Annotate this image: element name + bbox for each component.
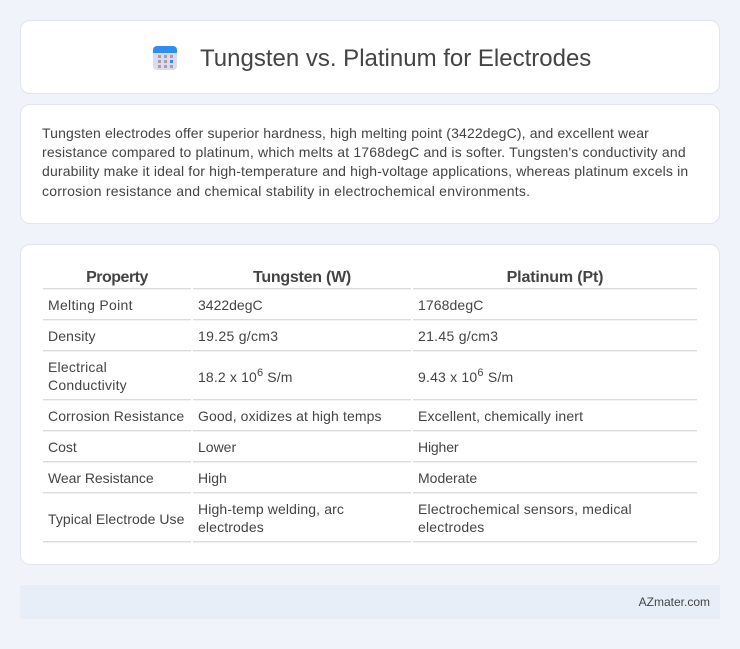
summary text: Tungsten electrodes offer superior hardness, high melting point (3422degC), and excellent wear (42, 124, 649, 140)
row: typical electrode use: electrodes (418, 519, 484, 535)
row: wear resistance (48, 470, 477, 486)
row: density: 19.25 g/cm3 (198, 328, 278, 344)
row: typical electrode use: High-temp welding, arc (198, 501, 344, 517)
table header: Property (86, 269, 148, 286)
row: melting point (48, 297, 483, 313)
row: electrical conductivity: 18.2 x 106 S/m (198, 367, 293, 385)
row: density (48, 328, 498, 344)
summary text: durability make it ideal for high-temperature and high-voltage applications, whereas platinum excels in (42, 163, 688, 179)
row: cost: Lower (198, 439, 236, 455)
row: corrosion resistance: Corrosion Resistance (48, 408, 184, 424)
row: density: Density (48, 328, 96, 344)
title: Tungsten vs. Platinum for Electrodes (200, 45, 591, 72)
row: corrosion resistance: Good, oxidizes at high temps (198, 408, 382, 424)
table header: Tungsten (W) (253, 269, 351, 286)
row: wear resistance: Moderate (418, 470, 477, 486)
summary text: corrosion resistance and chemical stability in electrochemical environments. (42, 183, 530, 199)
row: density: 21.45 g/cm3 (418, 328, 498, 344)
panel: summary (20, 104, 720, 224)
row: electrical conductivity: 9.43 x 106 S/m (418, 367, 513, 385)
summary text: resistance compared to platinum, which melts at 1768degC and is softer. Tungsten's conductivity and (42, 144, 686, 160)
row: corrosion resistance (48, 408, 583, 424)
row: typical electrode use: electrodes (198, 519, 264, 535)
row: melting point: 1768degC (418, 297, 483, 313)
row: electrical conductivity: Conductivity (48, 377, 127, 393)
row: wear resistance: High (198, 470, 227, 486)
row: cost: Cost (48, 439, 77, 455)
footer bar (20, 585, 720, 619)
row: corrosion resistance: Excellent, chemically inert (418, 408, 583, 424)
row: typical electrode use: Electrochemical sensors, medical (418, 501, 632, 517)
row: typical electrode use (48, 501, 632, 535)
row: typical electrode use: Typical Electrode Use (48, 511, 184, 527)
summary text (42, 124, 688, 199)
panel: comparison table (20, 244, 720, 565)
row: melting point: 3422degC (198, 297, 263, 313)
row: cost: Higher (418, 439, 458, 455)
row: cost (48, 439, 458, 455)
icon: calendar (153, 46, 177, 70)
row: wear resistance: Wear Resistance (48, 470, 154, 486)
footer text: source: AZmater.com (639, 595, 710, 609)
table header: Platinum (Pt) (507, 269, 603, 286)
row: electrical conductivity (48, 359, 513, 393)
row: electrical conductivity: Electrical (48, 359, 107, 375)
panel: title card (20, 20, 720, 94)
table header (86, 269, 603, 286)
comparison table (43, 269, 697, 543)
row: melting point: Melting Point (48, 297, 133, 313)
